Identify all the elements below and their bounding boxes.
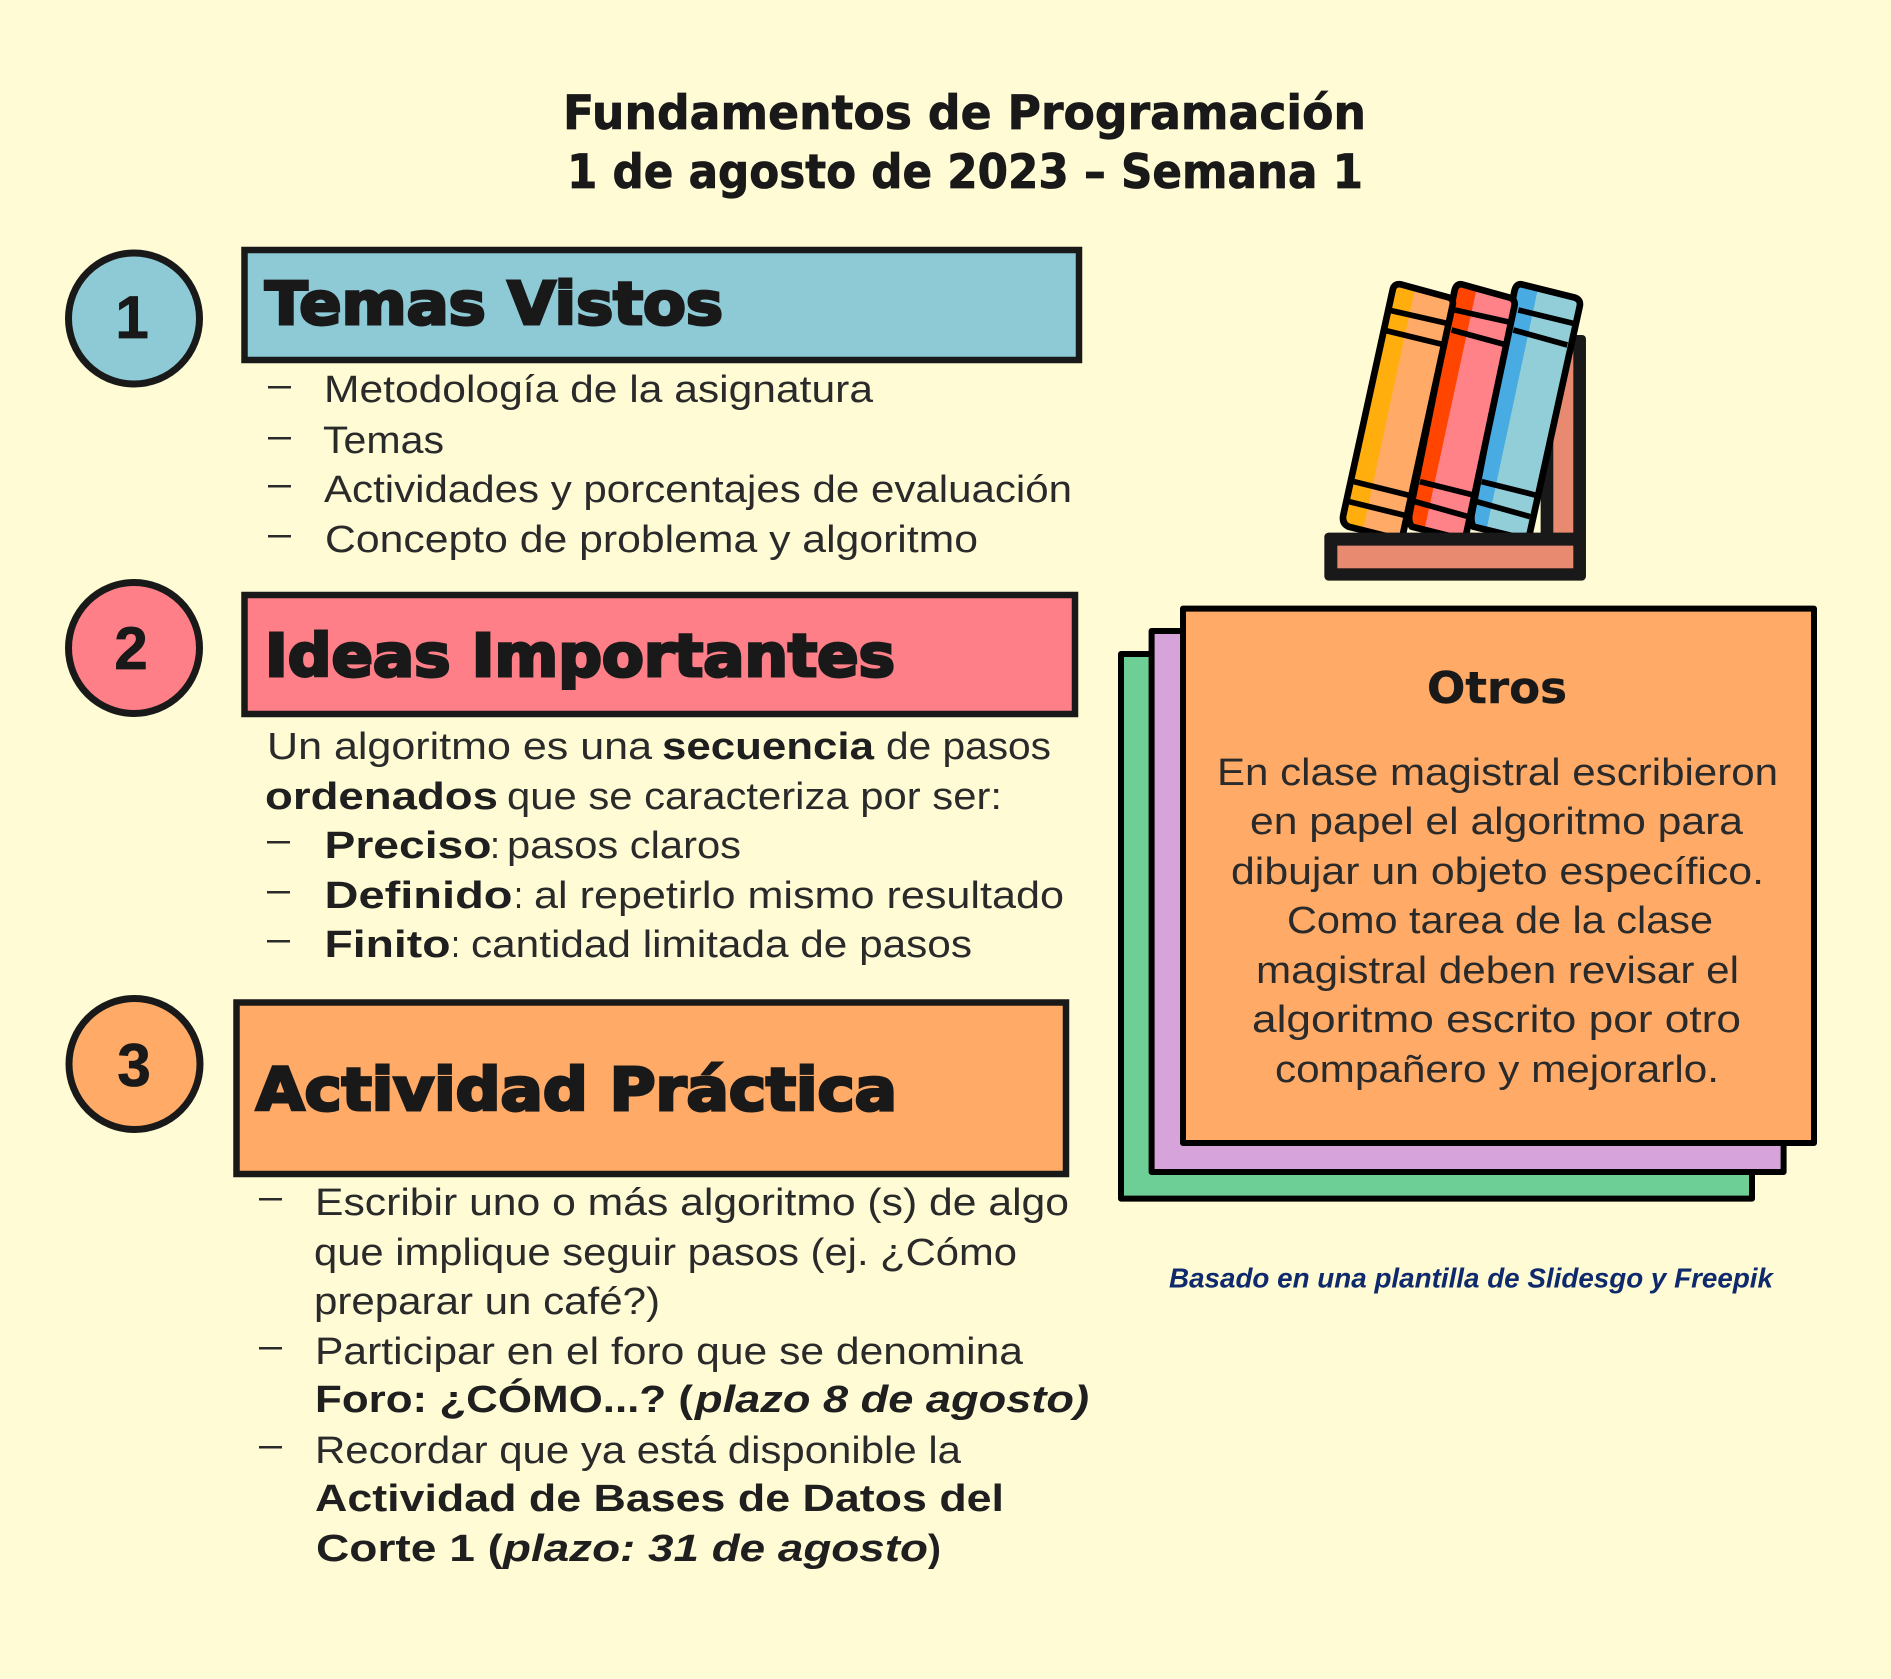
text: otros body [1217,752,1778,1091]
text: definition of algoritmo: ordenados [265,776,498,818]
heading: Otros: Otros [1427,663,1567,714]
title: 1 de agosto de 2023 – Semana 1 [567,145,1363,200]
heading: Actividad Práctica: Actividad Práctica [256,1055,897,1124]
text: definition of algoritmo: al repetirlo mismo resultado [534,875,1064,917]
list: actividades: plazo 8 de agosto) [694,1379,1089,1421]
text: otros body: algoritmo escrito por otro [1252,999,1741,1041]
number badge 1: 1 [115,284,149,351]
text: otros body: En clase magistral escribieron [1217,752,1778,794]
section 1: temas vistos [68,250,1079,561]
book: blue [1471,284,1580,540]
text: definition of algoritmo: Preciso [324,825,492,867]
heading: Ideas Importantes [244,595,1075,714]
heading: Actividad Práctica [236,1002,1066,1174]
number badge 2 [68,582,200,714]
text: definition of algoritmo: cantidad limitada de pasos [471,924,972,966]
book: pink [1409,284,1515,540]
list: temas: – [268,513,292,555]
text: definition of algoritmo: pasos claros [507,825,741,867]
list: actividades: plazo: 31 de agosto [502,1528,928,1570]
text: definition of algoritmo: : [490,825,500,867]
text: otros body: Como tarea de la clase [1287,900,1713,942]
heading: Temas Vistos: Temas Vistos [265,269,723,338]
text: definition of algoritmo: Un algoritmo es una [267,726,653,768]
number badge 2: 2 [114,615,148,682]
text: definition of algoritmo: Finito [324,924,450,966]
text: definition of algoritmo: – [267,869,291,911]
list: actividades: Foro: ¿CÓMO...? ( [315,1377,693,1421]
text: definition of algoritmo: secuencia [662,726,875,768]
section 3: actividad practica [69,998,1089,1570]
list: temas [268,364,1072,561]
shelf base [1324,533,1586,581]
list: actividades: Actividad de Bases de Datos del [315,1478,1004,1520]
text: definition of algoritmo [265,726,1064,966]
title [563,86,1366,200]
card: purple [1152,631,1784,1172]
section 2: ideas importantes [68,582,1075,966]
number badge 3 [69,998,200,1130]
number badge 1 [68,253,200,384]
book: orange [1343,284,1453,540]
card: green [1121,654,1752,1199]
credit line: Basado en una plantilla de Slidesgo y Freepik [1169,1262,1774,1294]
card: orange [1183,609,1814,1143]
text: otros body: dibujar un objeto específico. [1231,851,1764,893]
list: temas: – [268,463,292,505]
list: actividades: Escribir uno o más algoritmo (s) de algo [315,1182,1069,1224]
list: actividades: ) [928,1528,941,1570]
text: definition of algoritmo: – [267,918,291,960]
list: actividades: – [259,1176,283,1218]
text: definition of algoritmo: : [451,924,460,966]
number badge 3: 3 [117,1032,151,1099]
list: temas: – [268,415,292,457]
heading: Ideas Importantes: Ideas Importantes [265,621,895,690]
text: otros body: compañero y mejorarlo. [1275,1049,1719,1091]
icon: books on a shelf [1324,284,1586,581]
list: temas: Metodología de la asignatura [324,369,874,411]
list: temas: Concepto de problema y algoritmo [325,519,978,561]
list: actividades [259,1176,1089,1570]
list: actividades: preparar un café?) [314,1281,660,1323]
list: actividades: – [259,1325,283,1367]
text: definition of algoritmo: Definido [324,875,512,917]
list: actividades: – [259,1424,283,1466]
text: otros body: magistral deben revisar el [1256,950,1739,992]
panel: otros (stacked cards) [1121,609,1814,1199]
list: actividades: Participar en el foro que se denomina [315,1331,1024,1373]
text: definition of algoritmo: que se caracteriza por ser: [507,776,1002,818]
text: definition of algoritmo: de pasos [886,726,1051,768]
list: temas: Actividades y porcentajes de evaluación [324,469,1072,511]
heading: Temas Vistos [244,250,1079,360]
text: definition of algoritmo: : [514,875,523,917]
list: actividades: Corte 1 ( [316,1528,503,1570]
text: definition of algoritmo: – [267,819,291,861]
list: actividades: Recordar que ya está disponible la [315,1430,962,1472]
list: actividades: que implique seguir pasos (ej. ¿Cómo [314,1232,1017,1274]
list: temas: – [268,364,292,406]
text: otros body: en papel el algoritmo para [1250,801,1744,843]
title: Fundamentos de Programación [563,86,1366,141]
shelf upright [1541,335,1586,537]
list: temas: Temas [323,420,444,462]
